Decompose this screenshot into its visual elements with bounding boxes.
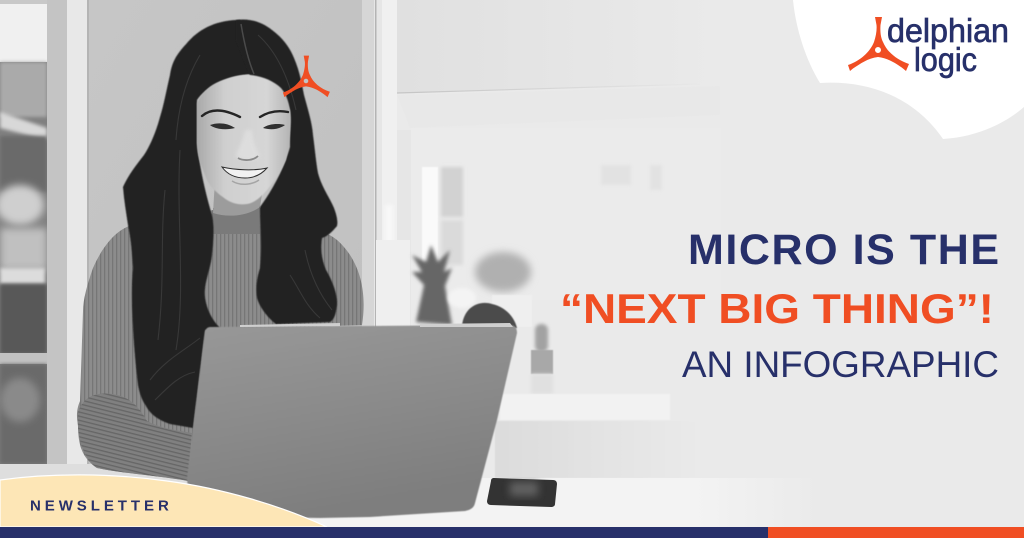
sweater xyxy=(77,205,364,481)
door trim xyxy=(362,0,397,330)
wordmark delphian: delphian xyxy=(887,12,1009,49)
bottom bar navy xyxy=(0,527,768,538)
title line 3: AN INFOGRAPHIC xyxy=(682,344,999,385)
eyes xyxy=(210,123,285,129)
logo wordmark xyxy=(887,12,1009,78)
hair parting xyxy=(241,24,254,74)
eyebrows xyxy=(202,110,288,117)
laptop xyxy=(187,323,517,518)
title xyxy=(560,226,999,385)
table xyxy=(0,464,200,528)
delphian logic logo xyxy=(848,12,1009,78)
phone on table xyxy=(487,478,557,507)
kitchen cabinet xyxy=(385,0,721,330)
sweater body and left arm xyxy=(77,208,364,481)
logo icon xyxy=(848,17,909,71)
newsletter tab xyxy=(0,475,327,527)
nose xyxy=(236,130,260,160)
smile xyxy=(222,167,267,178)
neck xyxy=(213,175,265,216)
woman at laptop xyxy=(77,19,364,481)
window with garden xyxy=(0,0,89,465)
hair highlights xyxy=(150,35,332,400)
hair left lock xyxy=(123,20,252,428)
pineapple, plants and shelf items xyxy=(376,240,705,478)
wall xyxy=(89,0,362,470)
wordmark logic: logic xyxy=(914,41,977,78)
sweater cuff xyxy=(78,393,192,481)
turtleneck collar xyxy=(213,205,260,234)
red logo mark on hair xyxy=(283,56,330,97)
title line 2: “NEXT BIG THING”! xyxy=(560,285,994,332)
bottom bar orange xyxy=(768,527,1024,538)
newsletter label: NEWSLETTER xyxy=(30,498,172,514)
logo corner blob xyxy=(793,0,1024,139)
title line 1: MICRO IS THE xyxy=(688,226,999,274)
hair right lock xyxy=(236,19,337,324)
face xyxy=(197,75,290,204)
